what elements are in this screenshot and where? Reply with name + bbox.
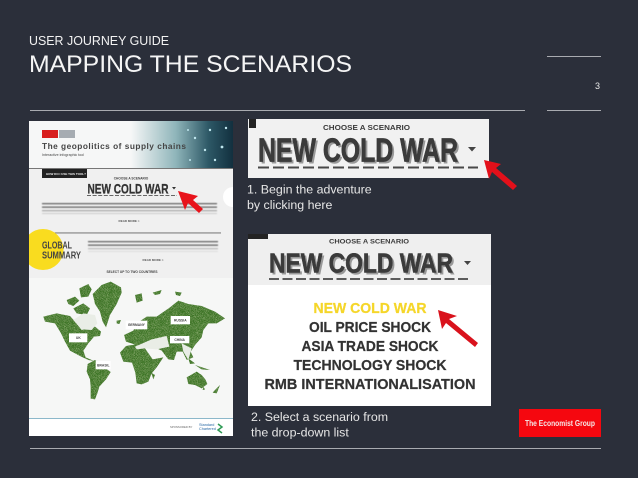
- dropdown options: NEW COLD WAR: [314, 301, 427, 317]
- header banner: The geopolitics of supply chains: [42, 141, 186, 151]
- scenario selector: CHOOSE A SCENARIO: [114, 176, 149, 180]
- panel: scenario dropdown: [248, 234, 491, 406]
- country labels: UK: [76, 336, 81, 340]
- country labels: [69, 316, 190, 369]
- subtitle: USER JOURNEY GUIDE: [29, 34, 169, 48]
- country labels: RUSSIA: [174, 318, 187, 322]
- menu button: HOW DO I USE THIS TOOL?: [46, 172, 86, 176]
- dropdown options: [264, 301, 476, 393]
- global summary badge: SUMMARY: [42, 250, 81, 261]
- country labels: GERMANY: [128, 323, 146, 327]
- dropdown options: RMB INTERNATIONALISATION: [264, 377, 476, 393]
- caption one: by clicking here: [247, 198, 333, 212]
- sponsor footer: Chartered: [199, 427, 216, 431]
- scenario selector: NEW COLD WAR: [88, 180, 168, 196]
- page number: 3: [595, 81, 600, 91]
- australia: [187, 372, 207, 388]
- panel: choose a scenario: NEW COLD WAR: [258, 132, 458, 168]
- snowy patches: [73, 313, 192, 360]
- next arrow tab: [223, 187, 233, 207]
- scenario selector: [87, 176, 177, 196]
- title: MAPPING THE SCENARIOS: [29, 51, 352, 78]
- panel: choose a scenario: [248, 119, 489, 178]
- eurasia: [124, 301, 225, 360]
- header banner: Interactive infographic tool: [42, 153, 84, 157]
- caption one: 1. Begin the adventure: [247, 182, 372, 196]
- panel: scenario dropdown: NEW COLD WAR: [271, 250, 455, 280]
- north america: [43, 313, 101, 361]
- header banner: [29, 121, 233, 169]
- world map: [29, 278, 233, 418]
- arctic islands: [67, 284, 92, 315]
- africa: [120, 345, 163, 384]
- greenland: [93, 282, 122, 327]
- country labels: CHINA: [174, 338, 186, 342]
- south america: [87, 360, 111, 399]
- sponsor footer: SPONSORED BY: [170, 425, 193, 429]
- logo: The Economist Group: The Economist Group: [525, 419, 595, 428]
- global summary badge: GLOBAL: [42, 240, 72, 251]
- summary paragraph: [88, 241, 218, 252]
- dropdown options: OIL PRICE SHOCK: [309, 320, 431, 336]
- logo: The Economist Group: [519, 409, 601, 437]
- dropdown options: TECHNOLOGY SHOCK: [294, 358, 447, 374]
- menu button: [42, 169, 87, 178]
- sponsor footer: [29, 418, 233, 436]
- islands: [117, 290, 220, 393]
- caption two: 2. Select a scenario from: [251, 410, 388, 424]
- red arrow: panel two: [438, 310, 478, 347]
- sponsor footer: Standard: [199, 423, 214, 427]
- panel: infographic tool screenshot: [22, 121, 233, 436]
- caption two: the drop-down list: [251, 426, 349, 440]
- panel: scenario dropdown: CHOOSE A SCENARIO: [329, 238, 409, 246]
- red arrow: [178, 191, 203, 213]
- red arrow: panel one: [484, 160, 517, 190]
- panel: choose a scenario: NEW COLD WAR: [260, 134, 460, 170]
- global summary badge: [29, 229, 81, 270]
- read more link: READ MORE >: [143, 258, 164, 262]
- panel: choose a scenario: CHOOSE A SCENARIO: [323, 123, 410, 132]
- dropdown options: ASIA TRADE SHOCK: [302, 339, 439, 355]
- intro paragraph: [42, 203, 217, 214]
- panel: scenario dropdown: NEW COLD WAR: [269, 248, 453, 278]
- read more link: READ MORE >: [119, 219, 140, 223]
- country labels: BRASIL: [97, 363, 110, 367]
- country prompt: SELECT UP TO TWO COUNTRIES: [106, 270, 158, 274]
